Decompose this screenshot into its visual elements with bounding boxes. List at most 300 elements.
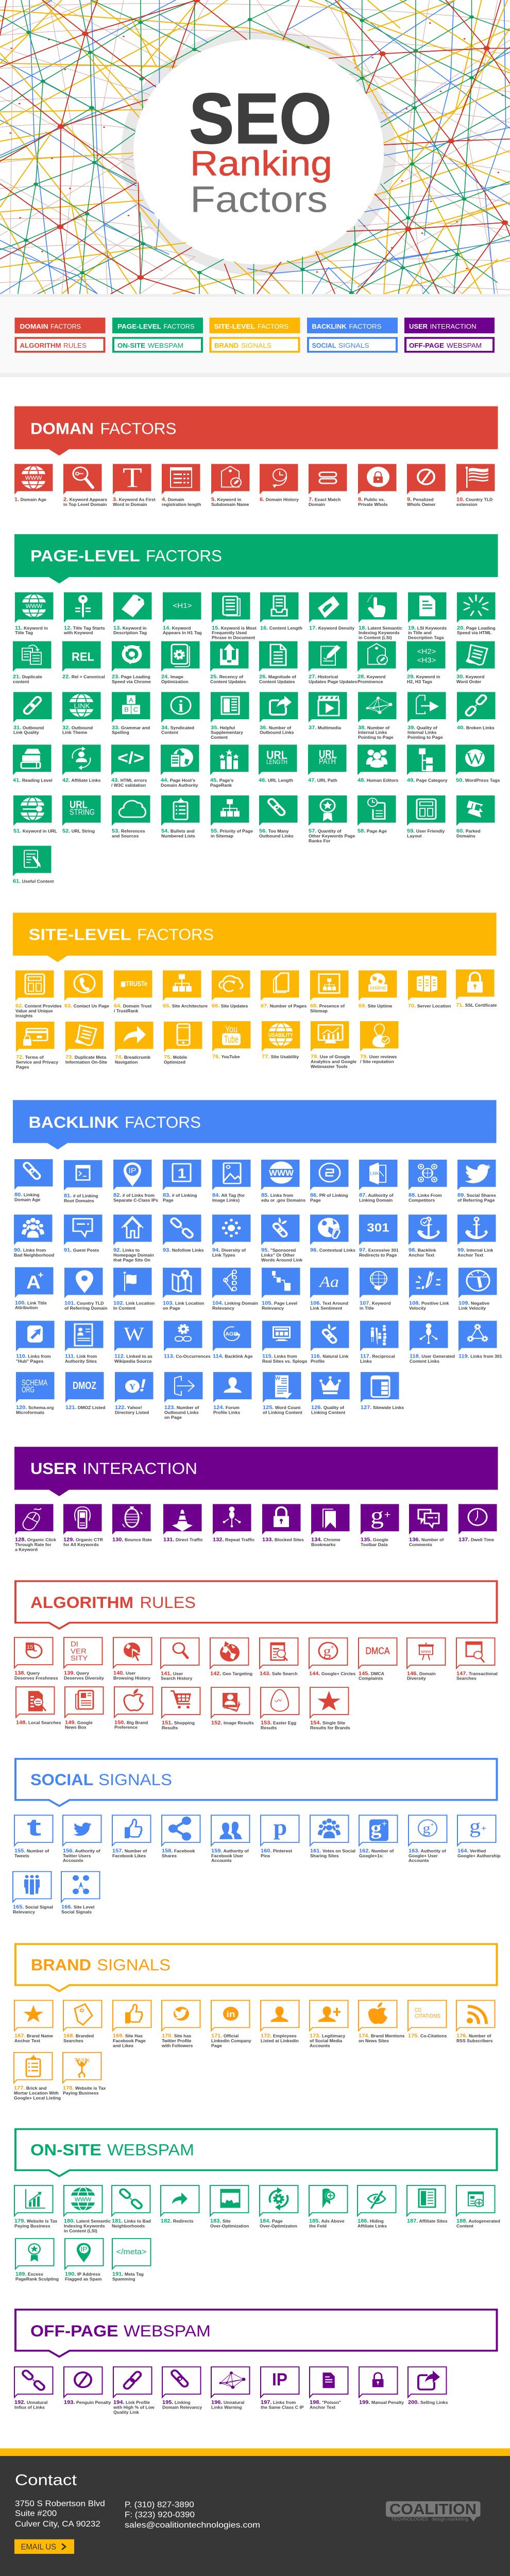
factor 87: 87. Authority of — [359, 1193, 394, 1198]
factor 84: 84. Alt Tag (for — [212, 1193, 245, 1198]
factor 35 — [211, 692, 249, 740]
factor 83: Page — [163, 1198, 174, 1202]
factor 93: 93. Nofollow Links — [163, 1248, 204, 1253]
factor 102 — [113, 1268, 155, 1311]
factor 120: 120. Schema.org — [16, 1405, 54, 1411]
factor 99 — [457, 1215, 496, 1258]
factor 1: www — [25, 474, 42, 482]
factor 136 — [409, 1504, 447, 1547]
factor 98: 98. Backlink — [409, 1248, 436, 1253]
factor 73: 73. Duplicate Meta — [65, 1055, 106, 1060]
factor 81: 81. # of Linking — [64, 1193, 98, 1199]
factor 71: 71. SSL Certificate — [456, 1003, 497, 1008]
factor 32: LINK — [74, 702, 90, 709]
factor 38 — [358, 692, 397, 740]
factor 171: Page — [211, 2044, 222, 2048]
factor 177 — [14, 2053, 61, 2100]
factor 185: the Fold — [309, 2224, 327, 2228]
factor 196: Links Warning — [211, 2405, 242, 2410]
factor 140: Browsing History — [113, 1676, 150, 1681]
legend: backlink factors: BACKLINK — [312, 323, 347, 330]
factor 115 — [262, 1321, 308, 1364]
factor 144: g — [324, 1644, 331, 1659]
factor 76: 76. YouTube — [212, 1055, 240, 1060]
factor 31: Link Quality — [13, 731, 39, 735]
factor 82: 82. # of Links from — [113, 1193, 155, 1198]
factor 18: Indexing Keywords — [359, 631, 400, 635]
factor 180: in Content (LSI) — [64, 2229, 97, 2233]
factor 46: LENGTH — [266, 759, 287, 766]
factor 28: 28. Keyword — [358, 674, 385, 680]
factor 67: 67. Number of Pages — [261, 1004, 307, 1009]
factor 18: 18. Latent Semantic — [359, 625, 402, 631]
factor 165: Relevancy — [13, 1910, 35, 1914]
factor 182 — [161, 2185, 199, 2224]
factor 19: Description Tags — [408, 636, 444, 640]
hero grey ring — [127, 35, 390, 270]
factor 141: Search History — [161, 1676, 193, 1681]
factor 59 — [407, 795, 445, 838]
factor 44 — [161, 744, 199, 788]
factor 118 — [410, 1321, 455, 1364]
factor 13: Description Tag — [113, 631, 147, 635]
factor 172: Listed at Linkedin — [261, 2039, 299, 2043]
panel: backlink factors — [13, 1100, 502, 1420]
factor 47: PATH — [319, 757, 336, 766]
factor 194 — [113, 2367, 155, 2415]
factor 56: Outbound Links — [259, 834, 294, 838]
factor 116: 116. Natural Link — [311, 1354, 348, 1360]
banner: on-site webspam: WEBSPAM — [107, 2141, 194, 2159]
factor 137: 137. Dwell Time — [458, 1537, 494, 1543]
factor 136: 136. Number of — [409, 1537, 444, 1543]
factor 23: 23. Page Loading — [112, 674, 150, 680]
factor 89 — [457, 1160, 496, 1202]
factor 33: Spelling — [112, 731, 129, 735]
legend: backlink factors — [307, 317, 398, 333]
banner: social signals: SOCIAL — [30, 1771, 94, 1789]
factor 54: 54. Bullets and — [161, 828, 195, 834]
factor 160: p — [274, 1815, 287, 1839]
logo: Coalition Technologies: TECHNOLOGIES — [392, 2517, 428, 2522]
factor 182: 182. Redirects — [161, 2219, 194, 2224]
factor 162: g — [371, 1817, 382, 1839]
factor 68: 68. Presence of — [310, 1004, 345, 1009]
factor 33: C — [133, 706, 138, 714]
factor 37: 37. Multimedia — [309, 725, 342, 731]
factor 161 — [310, 1815, 355, 1858]
factor 50 — [456, 744, 500, 783]
factor 164 — [457, 1815, 500, 1858]
factor 116 — [311, 1321, 349, 1364]
factor 39: Pointing to Page — [407, 736, 443, 740]
factor 160: 160. Pinterest — [261, 1849, 292, 1854]
factor 26 — [259, 641, 298, 684]
factor 179 — [14, 2185, 58, 2228]
factor 133 — [262, 1504, 304, 1543]
factor 39: 39. Quality of — [407, 725, 437, 731]
factor 134: 134. Chrome — [311, 1537, 341, 1543]
factor 119: 119. Links from 301 — [458, 1354, 502, 1360]
factor 1: 1. Domain Age — [14, 497, 46, 503]
factor 145 — [359, 1638, 397, 1681]
factor 81: Root Domains — [64, 1199, 94, 1203]
factor 65 — [163, 971, 208, 1009]
factor 68: Sitemap — [310, 1009, 328, 1013]
factor 5: 5. Keyword in — [211, 497, 241, 503]
title: Factors — [190, 179, 328, 220]
banner: brand signals — [15, 1944, 497, 1991]
factor 154 — [310, 1687, 350, 1731]
factor 122 — [115, 1372, 154, 1415]
address: Culver City, CA 90232 — [15, 2520, 100, 2529]
factor 149: News Box — [65, 1725, 87, 1730]
factor 66 — [212, 971, 250, 1009]
factor 29: H2, H3 Tags — [407, 680, 433, 684]
factor 167: 167. Brand Name — [14, 2033, 53, 2039]
factor 29: 29. Keyword in — [407, 674, 440, 680]
factor 75 — [164, 1022, 202, 1064]
factor 121 — [65, 1372, 105, 1411]
factor 1 — [14, 464, 53, 503]
factor 38: Internal Links — [358, 731, 387, 735]
factor 155: Tweets — [14, 1854, 29, 1858]
factor 194: Quality Link — [113, 2410, 139, 2415]
factor 127: 127. Sitewide Links — [361, 1405, 404, 1411]
factor 100 — [15, 1267, 54, 1310]
factor 41 — [13, 744, 53, 783]
factor 8: Private WhoIs — [358, 502, 388, 507]
factor 168: Searches — [63, 2039, 83, 2043]
factor 105: 105. Page Level — [262, 1301, 297, 1307]
factor 138: 138. Query — [14, 1671, 40, 1676]
factor 195: 195. Linking — [162, 2400, 191, 2405]
factor 5 — [211, 464, 249, 507]
factor 200: 200. Selling Links — [408, 2400, 448, 2405]
factor 25 — [210, 641, 248, 684]
factor 73: Information On-Site — [65, 1060, 108, 1064]
factor 99: Anchor Text — [457, 1253, 483, 1258]
factor 4: 4. Domain — [162, 497, 184, 503]
banner: domain factors — [14, 406, 498, 455]
factor 173: of Social Media — [310, 2039, 343, 2043]
factor 170 — [161, 2001, 200, 2048]
factor 48: 48. Human Editors — [358, 778, 399, 783]
factor 149 — [65, 1687, 103, 1730]
factor 100: + — [38, 1270, 44, 1280]
factor 184 — [260, 2185, 298, 2228]
factor 88: 88. Links From — [409, 1193, 442, 1198]
factor 199 — [359, 2367, 404, 2405]
factor 85: WWW — [269, 1169, 294, 1178]
factor 130: 130. Bounce Rate — [112, 1537, 152, 1543]
factor 54 — [161, 795, 200, 838]
factor 101: 101. Country TLD — [64, 1301, 104, 1307]
factor 49: 49. Page Category — [407, 778, 448, 783]
factor 165: 165. Social Signal — [13, 1905, 53, 1910]
legend: on-site webspam: WEBSPAM — [148, 342, 183, 349]
factor 97 — [359, 1215, 399, 1258]
factor 96: 96. Contextual Links — [310, 1248, 355, 1253]
factor 111: 111. Link from — [65, 1354, 97, 1360]
factor 101: of Referring Domain — [64, 1307, 108, 1311]
factor 135: g — [370, 1502, 384, 1529]
factor 4 — [162, 464, 201, 507]
email us button — [14, 2539, 74, 2554]
factor 178 — [63, 2053, 106, 2095]
factor 138 — [14, 1637, 58, 1681]
factor 13: 13. Keyword in — [113, 625, 147, 631]
factor 155: t — [27, 1814, 41, 1841]
factor 186: 186. Hiding — [358, 2219, 384, 2224]
factor 80 — [14, 1159, 53, 1202]
factor 133: 133. Blocked Sites — [262, 1537, 304, 1543]
banner: backlink factors: BACKLINK — [29, 1114, 119, 1132]
factor 11: 11. Keyword in — [15, 625, 48, 631]
factor 107: 107. Keyword — [360, 1301, 391, 1307]
factor 97: 97. Excessive 301 — [359, 1248, 399, 1253]
factor 91 — [64, 1215, 102, 1253]
factor 106: Link Sentiment — [310, 1307, 343, 1311]
factor 110: "Hub" Pages — [16, 1360, 44, 1364]
factor 186 — [358, 2185, 396, 2228]
factor 98 — [409, 1215, 447, 1258]
factor 195: Domain Relevancy — [162, 2405, 202, 2410]
factor 82: IP — [128, 1167, 137, 1175]
legend: algorithm rules — [15, 338, 104, 352]
hero white circle — [133, 39, 384, 264]
factor 3: 3. Keyword As First — [113, 497, 156, 503]
factor 24: Optimization — [161, 680, 189, 684]
factor 100: Attribution — [15, 1306, 38, 1310]
factor 134: Bookmarks — [311, 1543, 336, 1547]
legend: brand signals: BRAND — [214, 342, 239, 349]
banner: social signals: SIGNALS — [98, 1771, 172, 1789]
factor 92: 92. Links to — [113, 1248, 140, 1253]
factor 160 — [261, 1815, 299, 1858]
factor 64: 64. Domain Trust — [114, 1004, 151, 1009]
factor 159: 159. Authority of — [211, 1849, 249, 1854]
factor 173: Accounts — [310, 2044, 330, 2048]
factor 86: Page — [310, 1198, 321, 1202]
factor 84 — [212, 1160, 250, 1202]
factor 177: Mortar Location With — [14, 2091, 59, 2095]
factor 190: Flagged as Spam — [65, 2277, 101, 2281]
factor 30: Word Order — [456, 680, 482, 684]
factor 7: 7. Exact Match — [309, 497, 341, 503]
factor 55: 55. Priority of Page — [211, 828, 253, 834]
factor 29 — [407, 641, 445, 684]
legend panel — [0, 294, 510, 377]
factor 10: 10. Country TLD — [456, 497, 492, 503]
factor 151 — [162, 1687, 200, 1731]
factor 82 — [113, 1160, 158, 1202]
factor 147 — [456, 1638, 498, 1681]
factor 61 — [13, 846, 54, 885]
factor 130 — [112, 1504, 152, 1543]
factor 109: Link Velocity — [458, 1307, 486, 1311]
legend: user interaction — [404, 317, 495, 333]
factor 138: 15 — [27, 1645, 33, 1650]
factor 76: Tube — [224, 1034, 239, 1045]
factor 177: Google+ Local Listing — [14, 2096, 61, 2100]
factor 74 — [115, 1022, 154, 1064]
factor 187 — [407, 2185, 448, 2224]
factor 163: Accounts — [409, 1859, 429, 1863]
factor 46: URL — [266, 749, 287, 762]
factor 191: Spamming — [112, 2277, 135, 2281]
factor 69: online — [370, 986, 386, 991]
factor 94: 94. Diversity of — [212, 1248, 246, 1253]
factor 178: 178. Website is Tax — [63, 2086, 106, 2091]
factor 98: Anchor Text — [409, 1253, 434, 1258]
factor 147: Searches — [456, 1676, 477, 1681]
factor 14: 14. Keyword — [163, 625, 191, 631]
factor 111 — [65, 1321, 103, 1364]
factor 85: 85. Links from — [261, 1193, 293, 1198]
factor 57: Ranks For — [309, 839, 331, 843]
factor 100: A — [26, 1273, 41, 1293]
factor 79: / Site reputation — [360, 1060, 394, 1064]
factor 94 — [212, 1215, 250, 1258]
factor 43: / W3C validation — [111, 783, 146, 788]
factor 92: Homepage Domain — [113, 1253, 154, 1258]
factor 101 — [64, 1268, 108, 1311]
factor 39 — [407, 692, 446, 740]
factor 128: 128. Organic Click — [15, 1537, 56, 1543]
factor 115: Real Sites vs. Splogs — [262, 1360, 308, 1364]
factor 161: Sharing Sites — [310, 1854, 339, 1858]
factor 137 — [458, 1504, 497, 1543]
factor 22 — [62, 641, 105, 680]
factor 56: 56. Too Many — [259, 828, 289, 834]
factor 177: 177. Brick and — [14, 2086, 46, 2091]
factor 26: 26. Magnitude of — [259, 674, 296, 680]
factor 139: SITY — [71, 1655, 88, 1663]
factor 185 — [309, 2185, 347, 2228]
factor 14: Appears in H1 Tag — [163, 631, 202, 635]
legend: domain factors: DOMAIN — [20, 323, 48, 330]
factor 36: Outbound Links — [260, 731, 294, 735]
factor 29: <H3> — [417, 657, 436, 665]
factor 198 — [310, 2367, 348, 2410]
factor 50: W — [466, 750, 484, 768]
factor 68 — [310, 971, 348, 1013]
factor 175 — [408, 2001, 447, 2039]
factor 123 — [164, 1372, 203, 1420]
phone and email: F: (323) 920-0390 — [125, 2511, 195, 2519]
factor 100: 100. Link Title — [15, 1300, 47, 1306]
factor 9: 9. Penalized — [407, 497, 434, 503]
factor 126: 126. Quality of — [311, 1405, 344, 1411]
legend: on-site webspam: ON-SITE — [117, 342, 145, 349]
factor 49 — [407, 744, 448, 783]
factor 84: Image Links) — [212, 1198, 240, 1202]
factor 33 — [112, 692, 150, 735]
factor 156: Accounts — [63, 1859, 83, 1863]
factor 62 — [15, 971, 62, 1018]
factor 103: 103. Link Location — [163, 1301, 204, 1307]
factor 57: 57. Quantity of — [309, 828, 342, 834]
factor 53: 53. References — [112, 828, 145, 834]
factor 52: 52. URL String — [62, 828, 95, 834]
factor 35: 35. Helpful — [211, 725, 235, 731]
factor 77: 77. Site Usability — [262, 1055, 299, 1060]
factor 80: Domain Age — [14, 1198, 41, 1202]
factor 190: 190. IP Address — [65, 2272, 100, 2277]
factor 60: Domains — [456, 834, 475, 838]
factor 72: Pages — [16, 1065, 29, 1070]
banner: brand signals: BRAND — [31, 1956, 91, 1974]
factor 194: 194. Link Profile — [113, 2400, 150, 2405]
factor 114: 114. Backlink Age — [213, 1354, 253, 1360]
factor 135: Toolbar Data — [361, 1543, 388, 1547]
factor 9 — [407, 464, 445, 507]
factor 135: + — [384, 1509, 390, 1520]
factor 31 — [13, 692, 52, 735]
email us button: EMAIL US — [21, 2543, 56, 2551]
factor 10 — [456, 464, 495, 507]
legend: page-level factors: FACTORS — [164, 323, 195, 330]
legend: social signals — [308, 338, 397, 352]
factor 35: Content — [211, 736, 228, 740]
factor 28 — [358, 641, 396, 684]
title — [189, 79, 332, 220]
factor 40 — [457, 692, 496, 731]
factor 169: 169. Site Has — [113, 2033, 143, 2039]
factor 45: 45. Page's — [210, 778, 233, 783]
banner: off-page webspam — [15, 2310, 497, 2357]
factor 81 — [64, 1160, 102, 1203]
factor 105: Relevancy — [262, 1307, 284, 1311]
factor 196 — [211, 2367, 249, 2410]
factor 26: Content Updates — [259, 680, 295, 684]
factor 52: STRING — [70, 808, 95, 817]
factor 194: with High % of Low — [113, 2405, 155, 2410]
factor 2: 2. Keyword Appears — [63, 497, 107, 503]
factor 174 — [359, 2001, 405, 2043]
factor 171: 171. Official — [211, 2033, 239, 2039]
factor 169 — [113, 2001, 151, 2048]
banner: off-page webspam: WEBSPAM — [124, 2323, 211, 2340]
factor 138: Deserves Freshness — [14, 1676, 58, 1681]
legend: user interaction: USER — [409, 323, 428, 330]
factor 140 — [113, 1637, 151, 1681]
factor 77 — [262, 1021, 300, 1060]
factor 21 — [13, 641, 52, 684]
factor 154: 154. Single Site — [310, 1721, 345, 1726]
factor 53 — [112, 795, 150, 838]
factor 135 — [361, 1502, 399, 1547]
factor 192: Influx of Links — [14, 2405, 45, 2410]
factor 87 — [359, 1160, 398, 1202]
factor 114 — [213, 1321, 253, 1360]
factor 195 — [162, 2367, 202, 2410]
factor 74: 74. Breadcrumb — [115, 1055, 150, 1060]
factor 19: 19. LSI Keywords — [408, 625, 447, 631]
factor 150: 150. Big Brand — [114, 1720, 148, 1725]
factor 125: 125. Word Count — [263, 1405, 300, 1411]
factor 87: Linking Domain — [359, 1198, 393, 1202]
factor 117: 117. Reciprocal — [360, 1354, 395, 1360]
factor 120: Microformats — [16, 1411, 44, 1415]
factor 47: URL — [319, 748, 337, 761]
factor 33: 33. Grammar and — [112, 725, 150, 731]
banner: on-site webspam: ON-SITE — [30, 2141, 101, 2159]
factor 109 — [458, 1268, 497, 1311]
banner: algorithm rules: RULES — [140, 1594, 196, 1612]
factor 129: for All Keywords — [63, 1543, 99, 1547]
